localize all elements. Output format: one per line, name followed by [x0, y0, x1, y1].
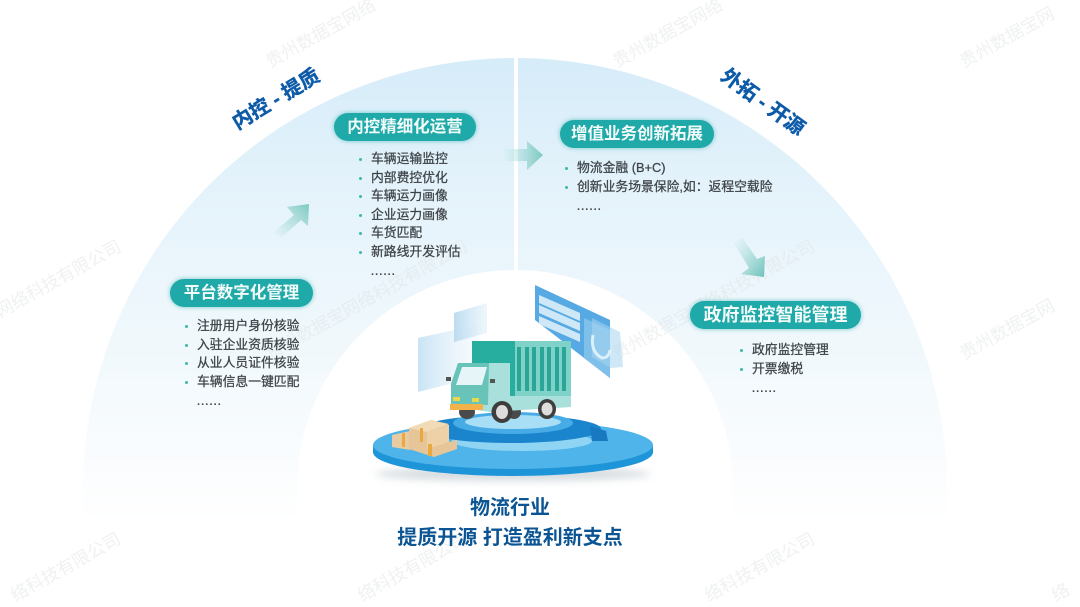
watermarks: 络科技有限公司 — [7, 529, 124, 605]
list: platform digital management: 从业人员证件核验 — [197, 355, 299, 370]
heading: internal control: 内控 - 提质 — [229, 65, 324, 134]
list: platform digital management: 注册用户身份核验 — [197, 318, 299, 333]
platform shadow — [375, 467, 651, 481]
list: platform digital management: 入驻企业资质核验 — [197, 336, 299, 352]
watermarks: 贵州数据宝网络科技有限公司 — [262, 236, 471, 363]
wheels back — [459, 405, 475, 419]
panel: right data screen — [535, 285, 623, 378]
pill: government supervision: 政府监控智能管理 — [704, 305, 848, 325]
list: value-added business: 创新业务场景保险,如：返程空载险 — [577, 178, 773, 194]
list: value-added business: 物流金融 (B+C) — [577, 160, 666, 175]
arrow: value-added to government — [734, 237, 765, 277]
arrow: platform to internal control — [274, 204, 309, 238]
list: internal control operations: ...... — [371, 266, 396, 278]
list: internal control operations: 新路线开发评估 — [371, 244, 461, 258]
list: platform digital management — [185, 318, 300, 408]
list: platform digital management: 车辆信息一键匹配 — [197, 374, 299, 388]
watermarks: 贵州数据宝网络科技有限公司 — [609, 236, 818, 363]
cab — [451, 363, 571, 412]
list: government supervision — [740, 342, 829, 395]
list: government supervision: 开票缴税 — [752, 360, 803, 376]
list: platform digital management: ...... — [197, 396, 222, 408]
pill: platform digital management — [170, 279, 313, 307]
list: internal control operations: 车辆运输监控 — [371, 151, 448, 166]
watermarks: 络科技有限公司 — [701, 529, 818, 605]
list: internal control operations — [359, 151, 461, 278]
arc band — [83, 56, 947, 530]
heading: external expansion: 外拓 - 开源 — [717, 65, 809, 140]
arrow: internal control to value-added — [502, 141, 543, 170]
list: internal control operations: 车货匹配 — [371, 225, 422, 240]
pill: government supervision — [690, 301, 861, 329]
panel: left translucent cards — [418, 303, 487, 392]
subtitle: new profit point: 提质开源 打造盈利新支点 — [397, 527, 623, 549]
list: government supervision: ...... — [752, 383, 777, 395]
cardboard boxes — [392, 420, 457, 457]
watermarks: 络科技有限公司 — [354, 529, 471, 605]
pill: platform digital management: 平台数字化管理 — [184, 284, 299, 302]
watermarks: 贵州数据宝网 — [956, 3, 1058, 71]
cargo box — [515, 341, 571, 407]
watermarks: 贵州数据宝网 — [956, 295, 1058, 363]
watermarks: 络 — [1048, 580, 1073, 605]
pill: value-added business — [560, 120, 714, 148]
title: logistics industry: 物流行业 — [470, 497, 550, 519]
truck — [446, 341, 571, 423]
pill: internal control operations: 内控精细化运营 — [347, 118, 463, 136]
list: internal control operations: 企业运力画像 — [371, 206, 448, 222]
list: value-added business: ...... — [577, 201, 602, 213]
list: internal control operations: 车辆运力画像 — [371, 188, 448, 203]
pill: internal control operations — [334, 113, 476, 141]
list: government supervision: 政府监控管理 — [752, 342, 829, 357]
list: value-added business — [565, 160, 773, 213]
illustration: truck on platform — [373, 285, 653, 481]
list: internal control operations: 内部费控优化 — [371, 170, 448, 184]
pill: value-added business: 增值业务创新拓展 — [571, 125, 703, 143]
wheels front — [492, 401, 512, 423]
platform base disc — [373, 412, 653, 476]
